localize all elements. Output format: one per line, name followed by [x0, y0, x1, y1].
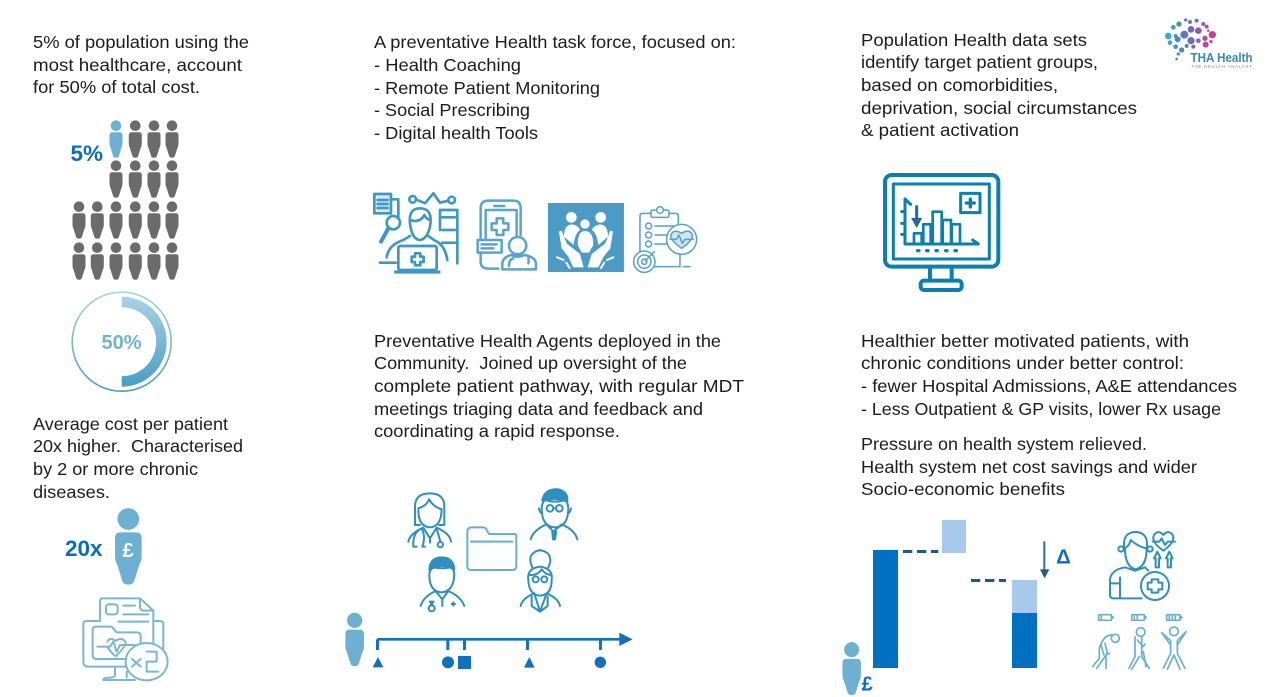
text: preventative health task force: - Health Coaching	[374, 55, 521, 75]
chart: cost savings bars	[842, 520, 1071, 696]
text: average cost per patient: 20x higher. Characterised	[33, 436, 243, 456]
icon: data analytics monitor	[885, 175, 998, 290]
text: population health data sets: & patient activation	[861, 120, 1019, 140]
icons: multidisciplinary team and timeline	[345, 489, 633, 669]
icons: task force tools	[374, 193, 697, 272]
icon: medium energy figure	[1129, 615, 1149, 669]
icon: low energy figure	[1093, 615, 1119, 668]
icon: healthier patient with rising heart	[1110, 532, 1175, 600]
text: population cost share	[33, 32, 249, 97]
icon: high energy figure	[1162, 615, 1186, 669]
text: average cost per patient: by 2 or more chronic	[33, 459, 198, 479]
icon: patient record with two conditions	[83, 598, 168, 680]
icon: male doctor with flask	[421, 557, 464, 611]
icon: digital tools clipboard	[634, 207, 697, 272]
pictogram: 5% of population	[70, 120, 178, 280]
text: healthier patients	[861, 331, 1237, 419]
text: preventative health task force: A preventative Health task force, focused on:	[374, 32, 736, 52]
text: population health data sets: based on comorbidities,	[861, 75, 1058, 95]
chart: cost savings bars: £	[862, 674, 873, 696]
text: population health data sets: identify target patient groups,	[861, 52, 1098, 72]
text: average cost per patient	[33, 414, 243, 502]
text: population cost share: 5% of population using the	[33, 32, 249, 52]
text: preventative health task force	[374, 32, 736, 143]
text: preventative health task force: - Remote Patient Monitoring	[374, 78, 600, 98]
text: preventative health agents	[374, 331, 744, 441]
icon: social prescribing caring hands	[548, 203, 624, 272]
text: preventative health task force: - Digital health Tools	[374, 123, 538, 143]
timeline: patient pathway	[345, 613, 633, 669]
text: system benefits: Socio-economic benefits	[861, 479, 1065, 499]
text: population cost share: most healthcare, account	[33, 55, 242, 75]
text: system benefits: Pressure on health system relieved.	[861, 434, 1147, 454]
text: population health data sets	[861, 30, 1137, 140]
text: preventative health agents: meetings triaging data and feedback and	[374, 399, 703, 419]
donut: 50% of cost	[72, 292, 171, 391]
icon: 20x cost person	[65, 508, 142, 585]
text: healthier patients: - Less Outpatient & GP visits, lower Rx usage	[861, 399, 1221, 419]
logo: THA Health: THE HEALTH ANALYST	[1191, 64, 1252, 69]
chart: cost savings bars: Δ	[1056, 546, 1071, 568]
text: preventative health agents: Preventative Health Agents deployed in the	[374, 331, 721, 351]
donut: 50% of cost: 50%	[101, 332, 142, 354]
text: average cost per patient: Average cost per patient	[33, 414, 228, 434]
icon: female doctor	[408, 493, 451, 547]
text: preventative health agents: Community. Joined up oversight of the	[374, 353, 687, 373]
text: healthier patients: - fewer Hospital Admissions, A&E attendances	[861, 376, 1237, 396]
text: average cost per patient: diseases.	[33, 482, 110, 502]
text: population health data sets: deprivation, social circumstances	[861, 98, 1137, 118]
icon: 20x cost person: £	[122, 540, 134, 562]
text: healthier patients: chronic conditions under better control:	[861, 353, 1184, 373]
icons: energy levels and posture	[1093, 615, 1186, 669]
text: preventative health task force: - Social Prescribing	[374, 100, 530, 120]
logo: THA Health	[1165, 18, 1253, 69]
pictogram: 5% of population: 5%	[70, 141, 103, 166]
icon: folder	[467, 527, 516, 570]
icon: male doctor with glasses	[531, 489, 577, 539]
icon: female doctor with glasses	[521, 550, 560, 612]
text: healthier patients: Healthier better motivated patients, with	[861, 331, 1189, 351]
logo: THA Health: THA Health	[1190, 50, 1253, 65]
text: population health data sets: Population Health data sets	[861, 30, 1087, 50]
icon: health coach at laptop	[374, 193, 457, 272]
text: system benefits	[861, 434, 1197, 499]
text: preventative health agents: complete patient pathway, with regular MDT	[374, 376, 744, 396]
icon: remote monitoring phone	[478, 201, 536, 269]
text: system benefits: Health system net cost savings and wider	[861, 457, 1197, 477]
icon: 20x cost person: 20x	[65, 536, 103, 561]
text: population cost share: for 50% of total cost.	[33, 77, 200, 97]
text: preventative health agents: coordinating a rapid response.	[374, 421, 620, 441]
